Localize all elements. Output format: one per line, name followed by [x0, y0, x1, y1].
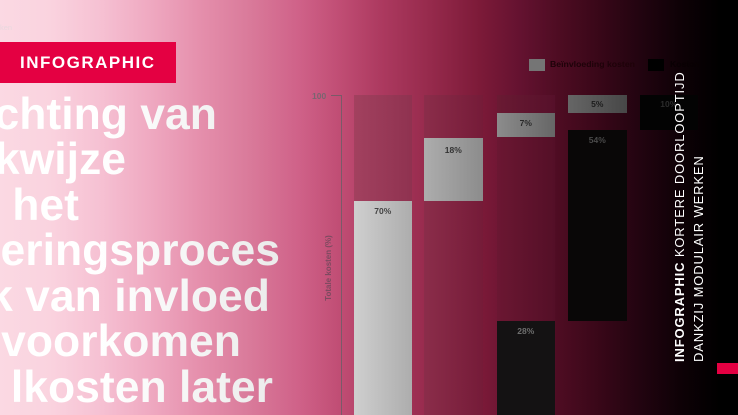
value 28%: 28% — [517, 326, 534, 336]
value 7%: 7% — [520, 118, 532, 128]
column 2 upper remainder — [424, 95, 482, 138]
badge: infographic — [0, 42, 176, 83]
heading: eringsproces — [1, 226, 280, 275]
vertical title line 1: INFOGRAPHIC KORTERE DOORLOOPTIJD — [672, 71, 687, 362]
bar: 54% costs — [568, 130, 626, 321]
legend label: costs: Kosten — [670, 59, 699, 69]
legend — [529, 59, 699, 71]
bar: 18% influence — [424, 138, 482, 201]
vertical title — [672, 71, 706, 362]
vertical title line 2: DANKZIJ MODULAIR WERKEN — [691, 155, 706, 362]
column 3 middle remainder — [496, 137, 555, 321]
badge label: INFOGRAPHIC — [20, 52, 156, 72]
bar: 28% costs — [496, 321, 555, 415]
y axis line — [341, 95, 342, 415]
heading: voorkomen — [1, 317, 241, 366]
legend swatch: influence on costs — [529, 59, 544, 70]
heading: het — [12, 181, 79, 230]
bar: 70% influence — [354, 201, 412, 415]
heading: lkosten later — [11, 363, 273, 412]
red accent block — [717, 363, 738, 374]
column 3 upper remainder — [496, 95, 555, 112]
value 54%: 54% — [589, 135, 606, 145]
heading: chting van — [0, 90, 217, 139]
column 2 lower remainder — [424, 201, 482, 415]
y axis value 100: 100 — [312, 90, 326, 100]
chart — [312, 90, 688, 415]
bar: 10% costs — [640, 95, 698, 130]
y axis label: Totale kosten (%) — [324, 235, 333, 301]
faint top-left text: ken — [0, 23, 12, 32]
bar: 5% influence — [568, 95, 626, 112]
value 70%: 70% — [374, 206, 391, 216]
legend label: influence on costs: Beïnvloeding kosten — [550, 59, 635, 69]
value 5%: 5% — [591, 99, 603, 109]
value 18%: 18% — [445, 144, 462, 154]
heading — [0, 90, 280, 412]
value 10%: 10% — [660, 99, 677, 109]
y axis tick — [331, 95, 341, 96]
column 1 remainder — [354, 95, 412, 201]
legend swatch: costs — [648, 59, 664, 70]
bar: 7% influence — [496, 112, 555, 137]
